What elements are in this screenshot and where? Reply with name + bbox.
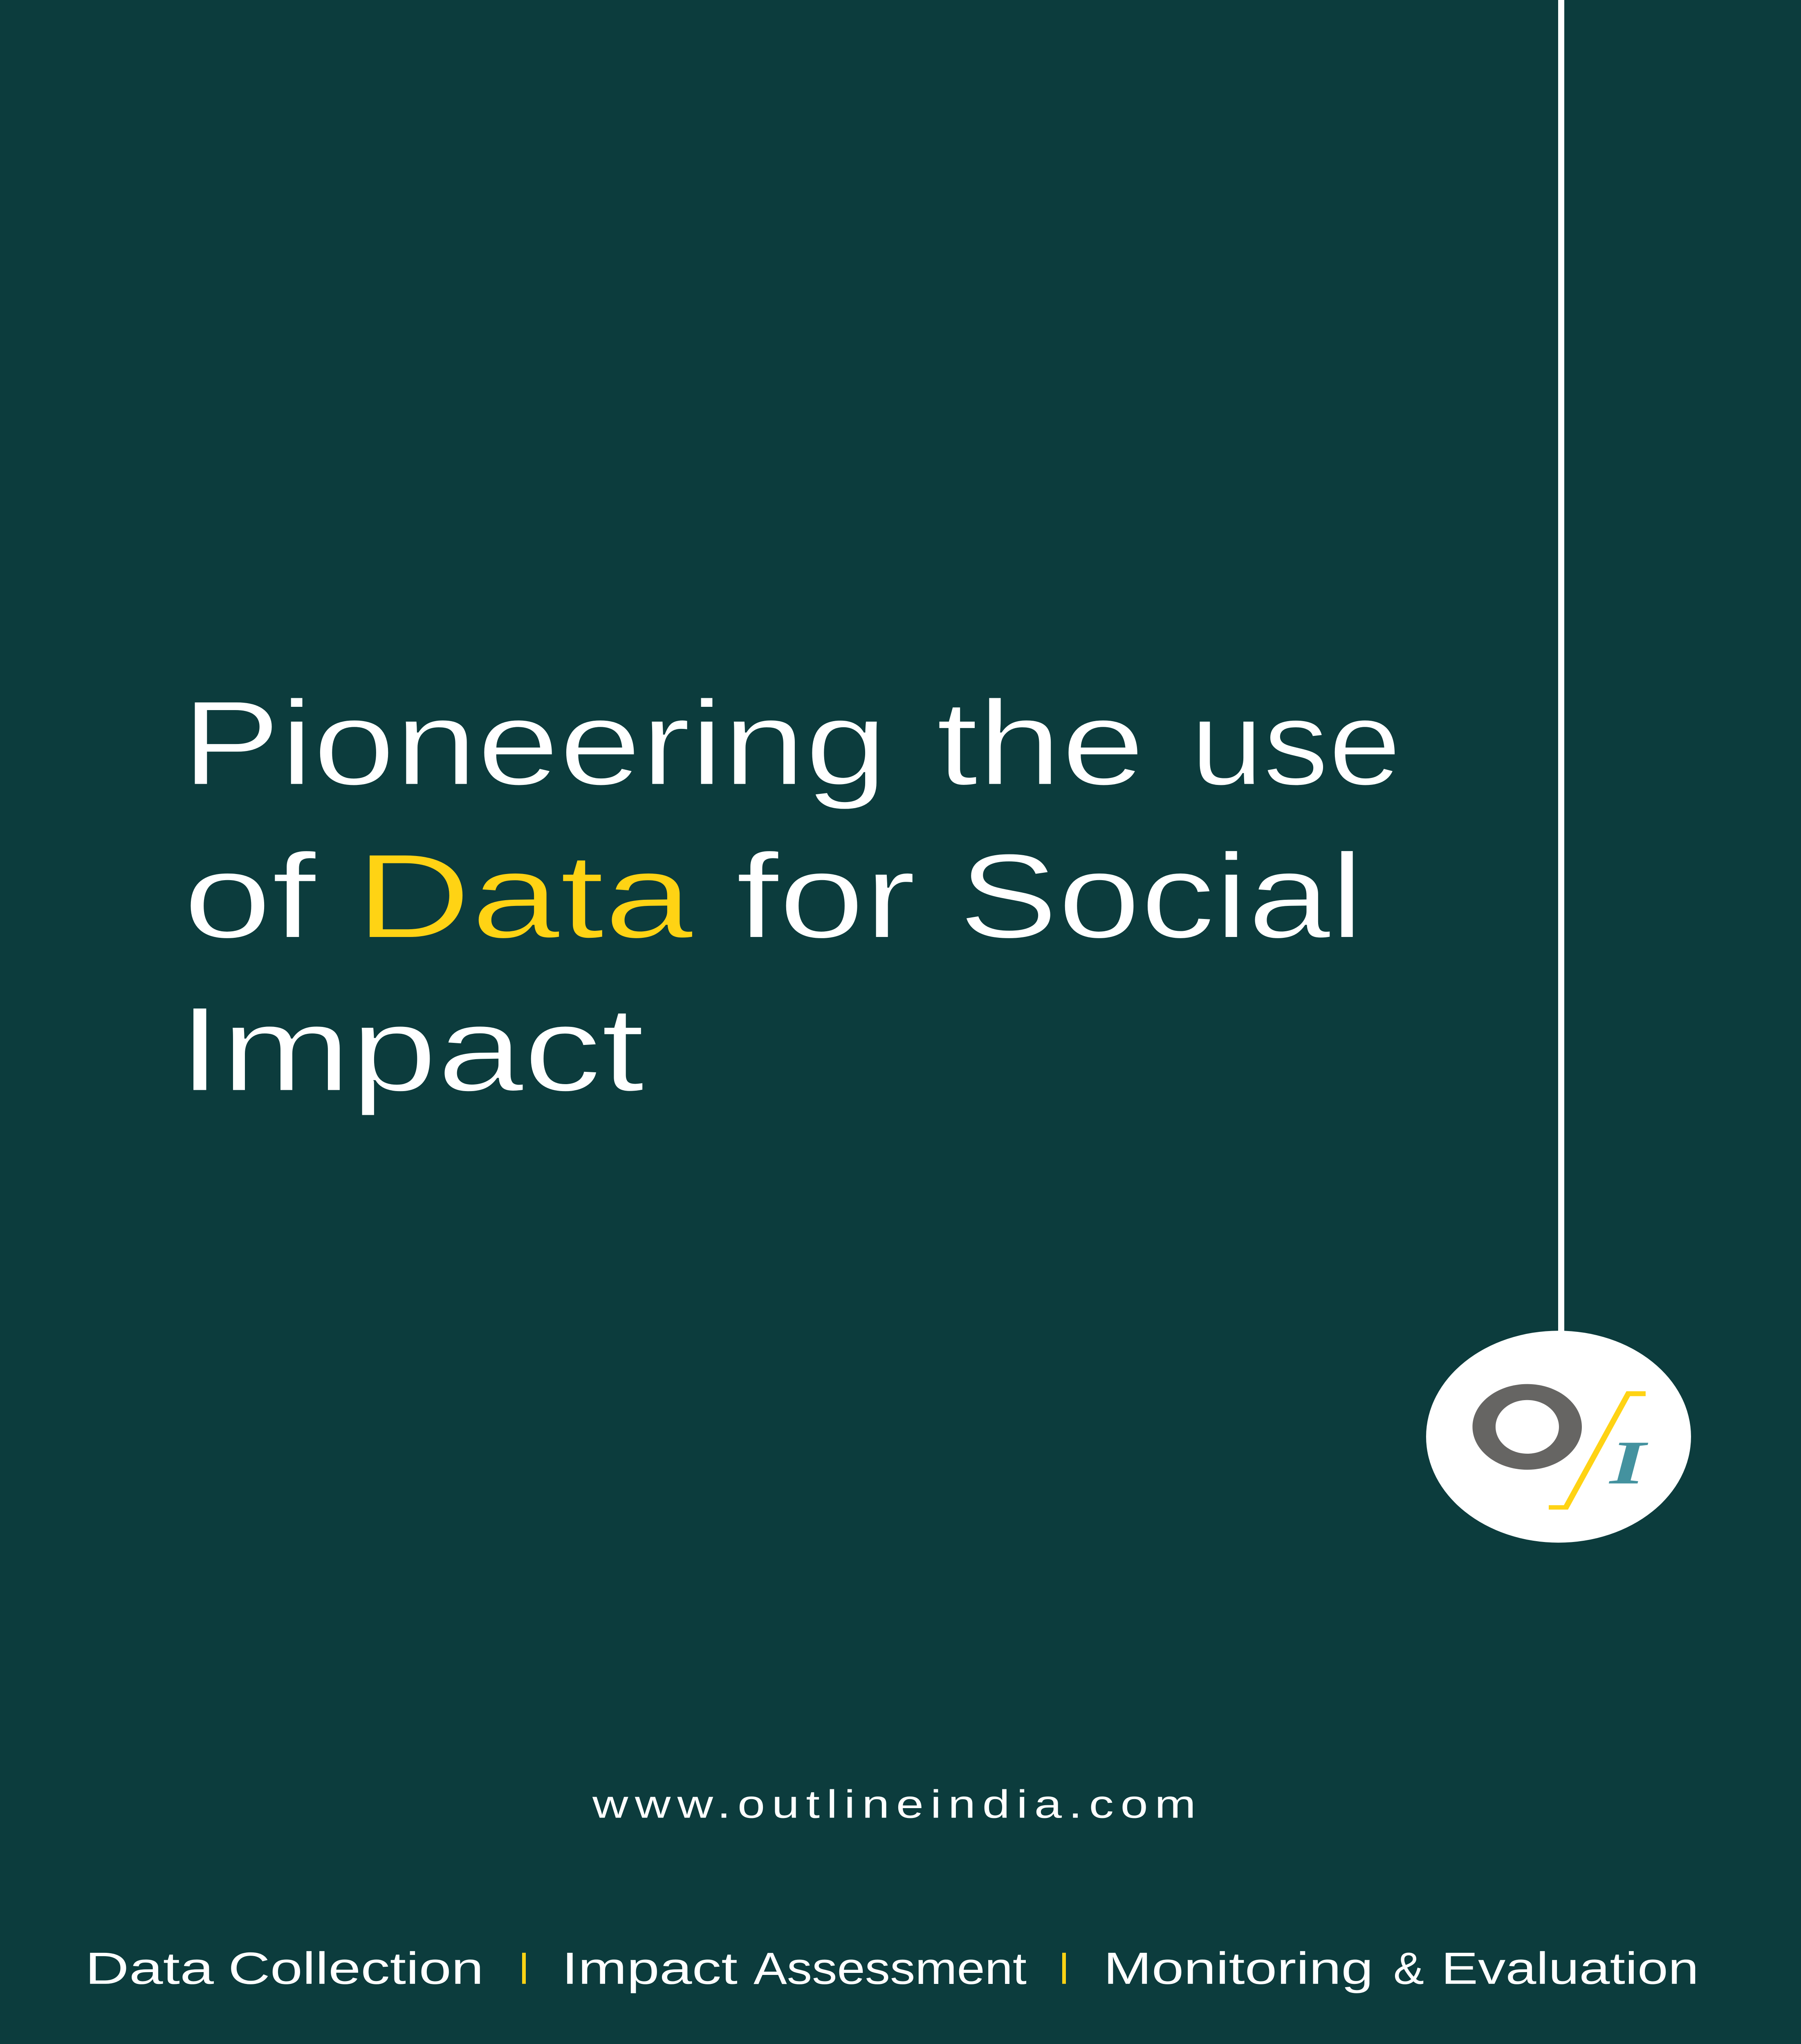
logo letter I: I (1608, 1429, 1648, 1497)
service: impact assessment: Impact (562, 1943, 738, 1994)
service: data collection (85, 1943, 484, 1994)
title line 1 (182, 675, 1401, 811)
services strip (85, 1943, 1699, 1994)
title line 1: use (1191, 675, 1401, 810)
service: monitoring and evaluation: & (1393, 1943, 1424, 1994)
title line 2: of (183, 829, 316, 963)
service: impact assessment: Assessment (754, 1943, 1027, 1994)
service: monitoring and evaluation: Evaluation (1441, 1943, 1699, 1994)
title line 1: the (936, 675, 1145, 810)
title line 2: Social (959, 829, 1364, 963)
title (178, 675, 1401, 1117)
service: data collection: Data (85, 1943, 214, 1994)
title line 3: Impact (178, 982, 645, 1117)
service: monitoring and evaluation: Monitoring (1103, 1943, 1373, 1994)
service: data collection: Collection (228, 1943, 484, 1994)
yellow separator (1062, 1953, 1066, 1984)
logo badge (1426, 1331, 1691, 1543)
logo yellow slash (1549, 1391, 1646, 1510)
title line 2: Data (356, 829, 694, 963)
logo letter O (1473, 1384, 1582, 1470)
service: impact assessment (562, 1943, 1027, 1994)
service: monitoring and evaluation (1103, 1943, 1699, 1994)
website url: www.outlineindia.com (592, 1782, 1196, 1827)
title line 2: for (736, 829, 916, 963)
yellow separator (522, 1953, 526, 1984)
title line 1: Pioneering (182, 675, 887, 811)
title line 2 (183, 829, 1364, 963)
hanging line (1558, 0, 1564, 1332)
